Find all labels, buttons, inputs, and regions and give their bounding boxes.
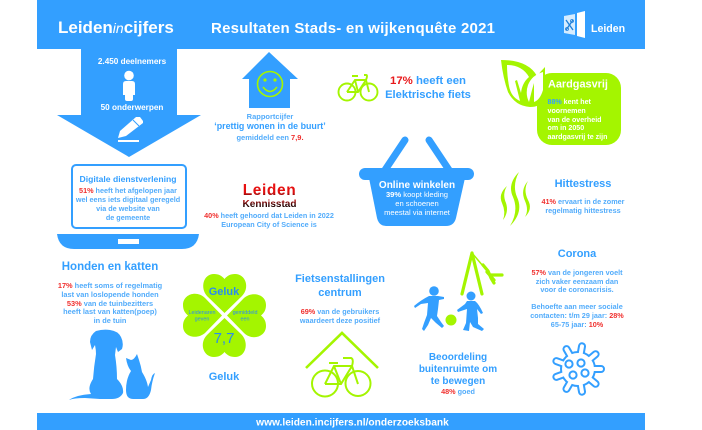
text: beoordeling buitenruimte: Beoordeling — [429, 352, 487, 363]
icon: heat waves — [501, 172, 530, 226]
text: beoordeling buitenruimte: 48% goed — [441, 387, 475, 396]
icon: clover: Leidenaren — [189, 310, 215, 316]
panel: aardgasvrij — [501, 60, 621, 145]
panel: aardgasvrij: van de overheid — [548, 116, 602, 124]
panel: online winkelen basket: 39% koopt kleding — [386, 190, 448, 199]
footer band — [37, 413, 645, 430]
text: elektrische fiets — [385, 75, 471, 101]
logo: Leiden in cijfers: Leidenincijfers — [58, 18, 174, 37]
text: beoordeling buitenruimte: buitenruimte om — [419, 364, 497, 375]
icon: clover: geven — [195, 316, 209, 322]
text: corona: 65-75 jaar: 10% — [551, 320, 604, 329]
text: corona — [530, 248, 624, 329]
panel: online winkelen basket: meestal via internet — [384, 208, 451, 217]
text: fietsenstallingen: 69% van de gebruikers — [301, 307, 379, 316]
text: corona: Behoefte aan meer sociale — [531, 302, 623, 311]
text: elektrische fiets: Elektrische fiets — [385, 89, 471, 101]
text: honden en katten: in de tuin — [94, 316, 127, 325]
text: beoordeling buitenruimte: te bewegen — [431, 376, 485, 387]
text: corona: contacten: t/m 29 jaar: 28% — [530, 311, 624, 320]
panel: aardgasvrij: om in 2050 — [548, 124, 584, 132]
text: fietsenstallingen — [295, 273, 385, 325]
panel: aardgasvrij: Aardgasvrij — [548, 78, 608, 90]
icon: smiley — [258, 72, 282, 96]
logo: Leiden Kennisstad: Leiden — [243, 182, 296, 199]
panel: aardgasvrij: voornemen — [548, 107, 586, 115]
panel: laptop — [57, 165, 199, 249]
text: honden en katten — [58, 261, 163, 325]
title: Resultaten Stads- en wijkenquête 2021 — [211, 20, 495, 37]
text: honden en katten: last van loslopende honden — [61, 290, 159, 299]
icon: children playing — [414, 253, 502, 331]
text: hittestress: 41% ervaart in de zomer — [541, 197, 625, 206]
icon: leaves inner — [507, 65, 543, 102]
icon: leaves outer — [501, 60, 545, 107]
panel: online winkelen basket: Online winkelen — [379, 180, 455, 191]
text: corona: 57% van de jongeren voelt — [531, 268, 623, 277]
text: hittestress: Hittestress — [555, 178, 611, 190]
panel: aardgasvrij: aardgasvrij te zijn — [548, 133, 607, 141]
text: fietsenstallingen: Fietsenstallingen — [295, 273, 385, 285]
logo: Leiden municipality — [564, 11, 625, 38]
arrow: participants — [57, 49, 201, 157]
header band — [37, 0, 645, 49]
footer band: www.leiden.incijfers.nl/onderzoeksbank — [255, 418, 449, 428]
arrow: participants: 50 onderwerpen — [101, 103, 163, 112]
text: beoordeling buitenruimte — [419, 352, 497, 396]
heading: geluk: Geluk — [209, 371, 240, 383]
text: elektrische fiets: 17% heeft een — [390, 75, 466, 87]
text: European City of Science: European City of Science is — [221, 220, 317, 229]
logo: Leiden municipality: Leiden — [591, 23, 625, 35]
arrow: participants: 2.450 deelnemers — [98, 57, 167, 66]
panel: laptop: 51% heeft het afgelopen jaar — [79, 186, 177, 195]
text: honden en katten: 53% van de tuinbezitters — [67, 299, 153, 308]
panel: laptop: via de website van — [96, 204, 160, 213]
text: rapportcijfer — [214, 112, 326, 142]
text: rapportcijfer: gemiddeld een 7,9. — [236, 133, 304, 142]
panel: online winkelen basket — [359, 140, 474, 226]
text: European City of Science: 40% heeft gehoord dat Leiden in 2022 — [204, 211, 334, 220]
text: hittestress: regelmatig hittestress — [545, 206, 621, 215]
text: fietsenstallingen: centrum — [318, 287, 362, 299]
text: honden en katten: Honden en katten — [62, 261, 158, 273]
text: rapportcijfer: ‘prettig wonen in de buurt’ — [214, 121, 326, 131]
icon: bike shelter — [306, 333, 378, 396]
panel: laptop: wel eens iets digitaal geregeld — [75, 195, 180, 204]
text: corona: zich vaker eenzaam dan — [536, 277, 618, 286]
text: corona: Corona — [558, 248, 597, 260]
text: fietsenstallingen: waardeert deze positief — [299, 316, 381, 325]
icon: clover: een — [240, 316, 250, 322]
panel: aardgasvrij: 88% kent het — [548, 98, 592, 106]
icon: clover: gemiddeld — [233, 310, 257, 316]
icon: clover — [183, 274, 266, 357]
logo: Leiden Kennisstad: Kennisstad — [243, 199, 296, 210]
icon: pencil — [118, 117, 143, 142]
logo: Leiden Kennisstad — [243, 182, 296, 210]
house with smiley — [242, 52, 298, 108]
icon: clover: 7,7 — [214, 330, 234, 347]
panel: laptop: de gemeente — [106, 213, 150, 222]
icon: green bicycle — [338, 75, 378, 100]
text: hittestress — [541, 178, 625, 215]
panel: laptop: Digitale dienstverlening — [80, 174, 176, 184]
text: honden en katten: heeft last van katten(poep) — [63, 307, 157, 316]
icon: clover: Geluk — [209, 286, 240, 298]
text: European City of Science — [204, 211, 334, 229]
text: rapportcijfer: Rapportcijfer — [247, 112, 293, 121]
icon: dog and cat silhouette — [69, 330, 155, 400]
panel: online winkelen basket: en schoenen — [395, 199, 439, 208]
icon: coronavirus — [556, 346, 601, 392]
text: honden en katten: 17% heeft soms of regelmatig — [58, 281, 163, 290]
icon: person — [123, 71, 135, 101]
text: corona: voor de coronacrisis. — [540, 285, 614, 294]
